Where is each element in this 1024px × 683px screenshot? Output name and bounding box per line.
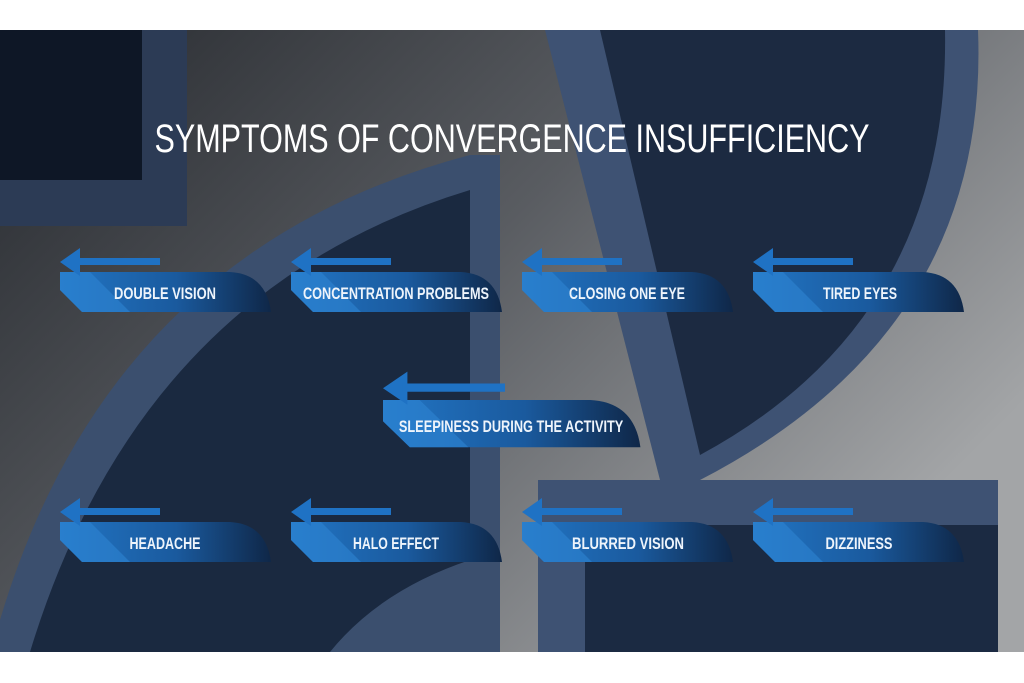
label: closing one eye: CLOSING ONE EYE [569, 284, 685, 303]
label: double vision: DOUBLE VISION [114, 284, 216, 303]
label: dizziness [753, 498, 964, 562]
label: concentration problems: CONCENTRATION PROBLEMS [303, 284, 489, 303]
label: blurred vision: BLURRED VISION [572, 534, 684, 553]
label: headache: HEADACHE [130, 534, 200, 553]
label: tired eyes [753, 248, 964, 312]
label: closing one eye [522, 248, 733, 312]
label: halo effect [291, 498, 502, 562]
label: headache [60, 498, 271, 562]
label: sleepiness during the activity [383, 372, 640, 447]
label: dizziness: DIZZINESS [826, 534, 892, 553]
label: tired eyes: TIRED EYES [823, 284, 897, 303]
label: double vision [60, 248, 271, 312]
label: concentration problems [291, 248, 502, 312]
label: blurred vision [522, 498, 733, 562]
label: sleepiness during the activity: SLEEPINESS DURING THE ACTIVITY [399, 417, 623, 436]
label: halo effect: HALO EFFECT [353, 534, 439, 553]
